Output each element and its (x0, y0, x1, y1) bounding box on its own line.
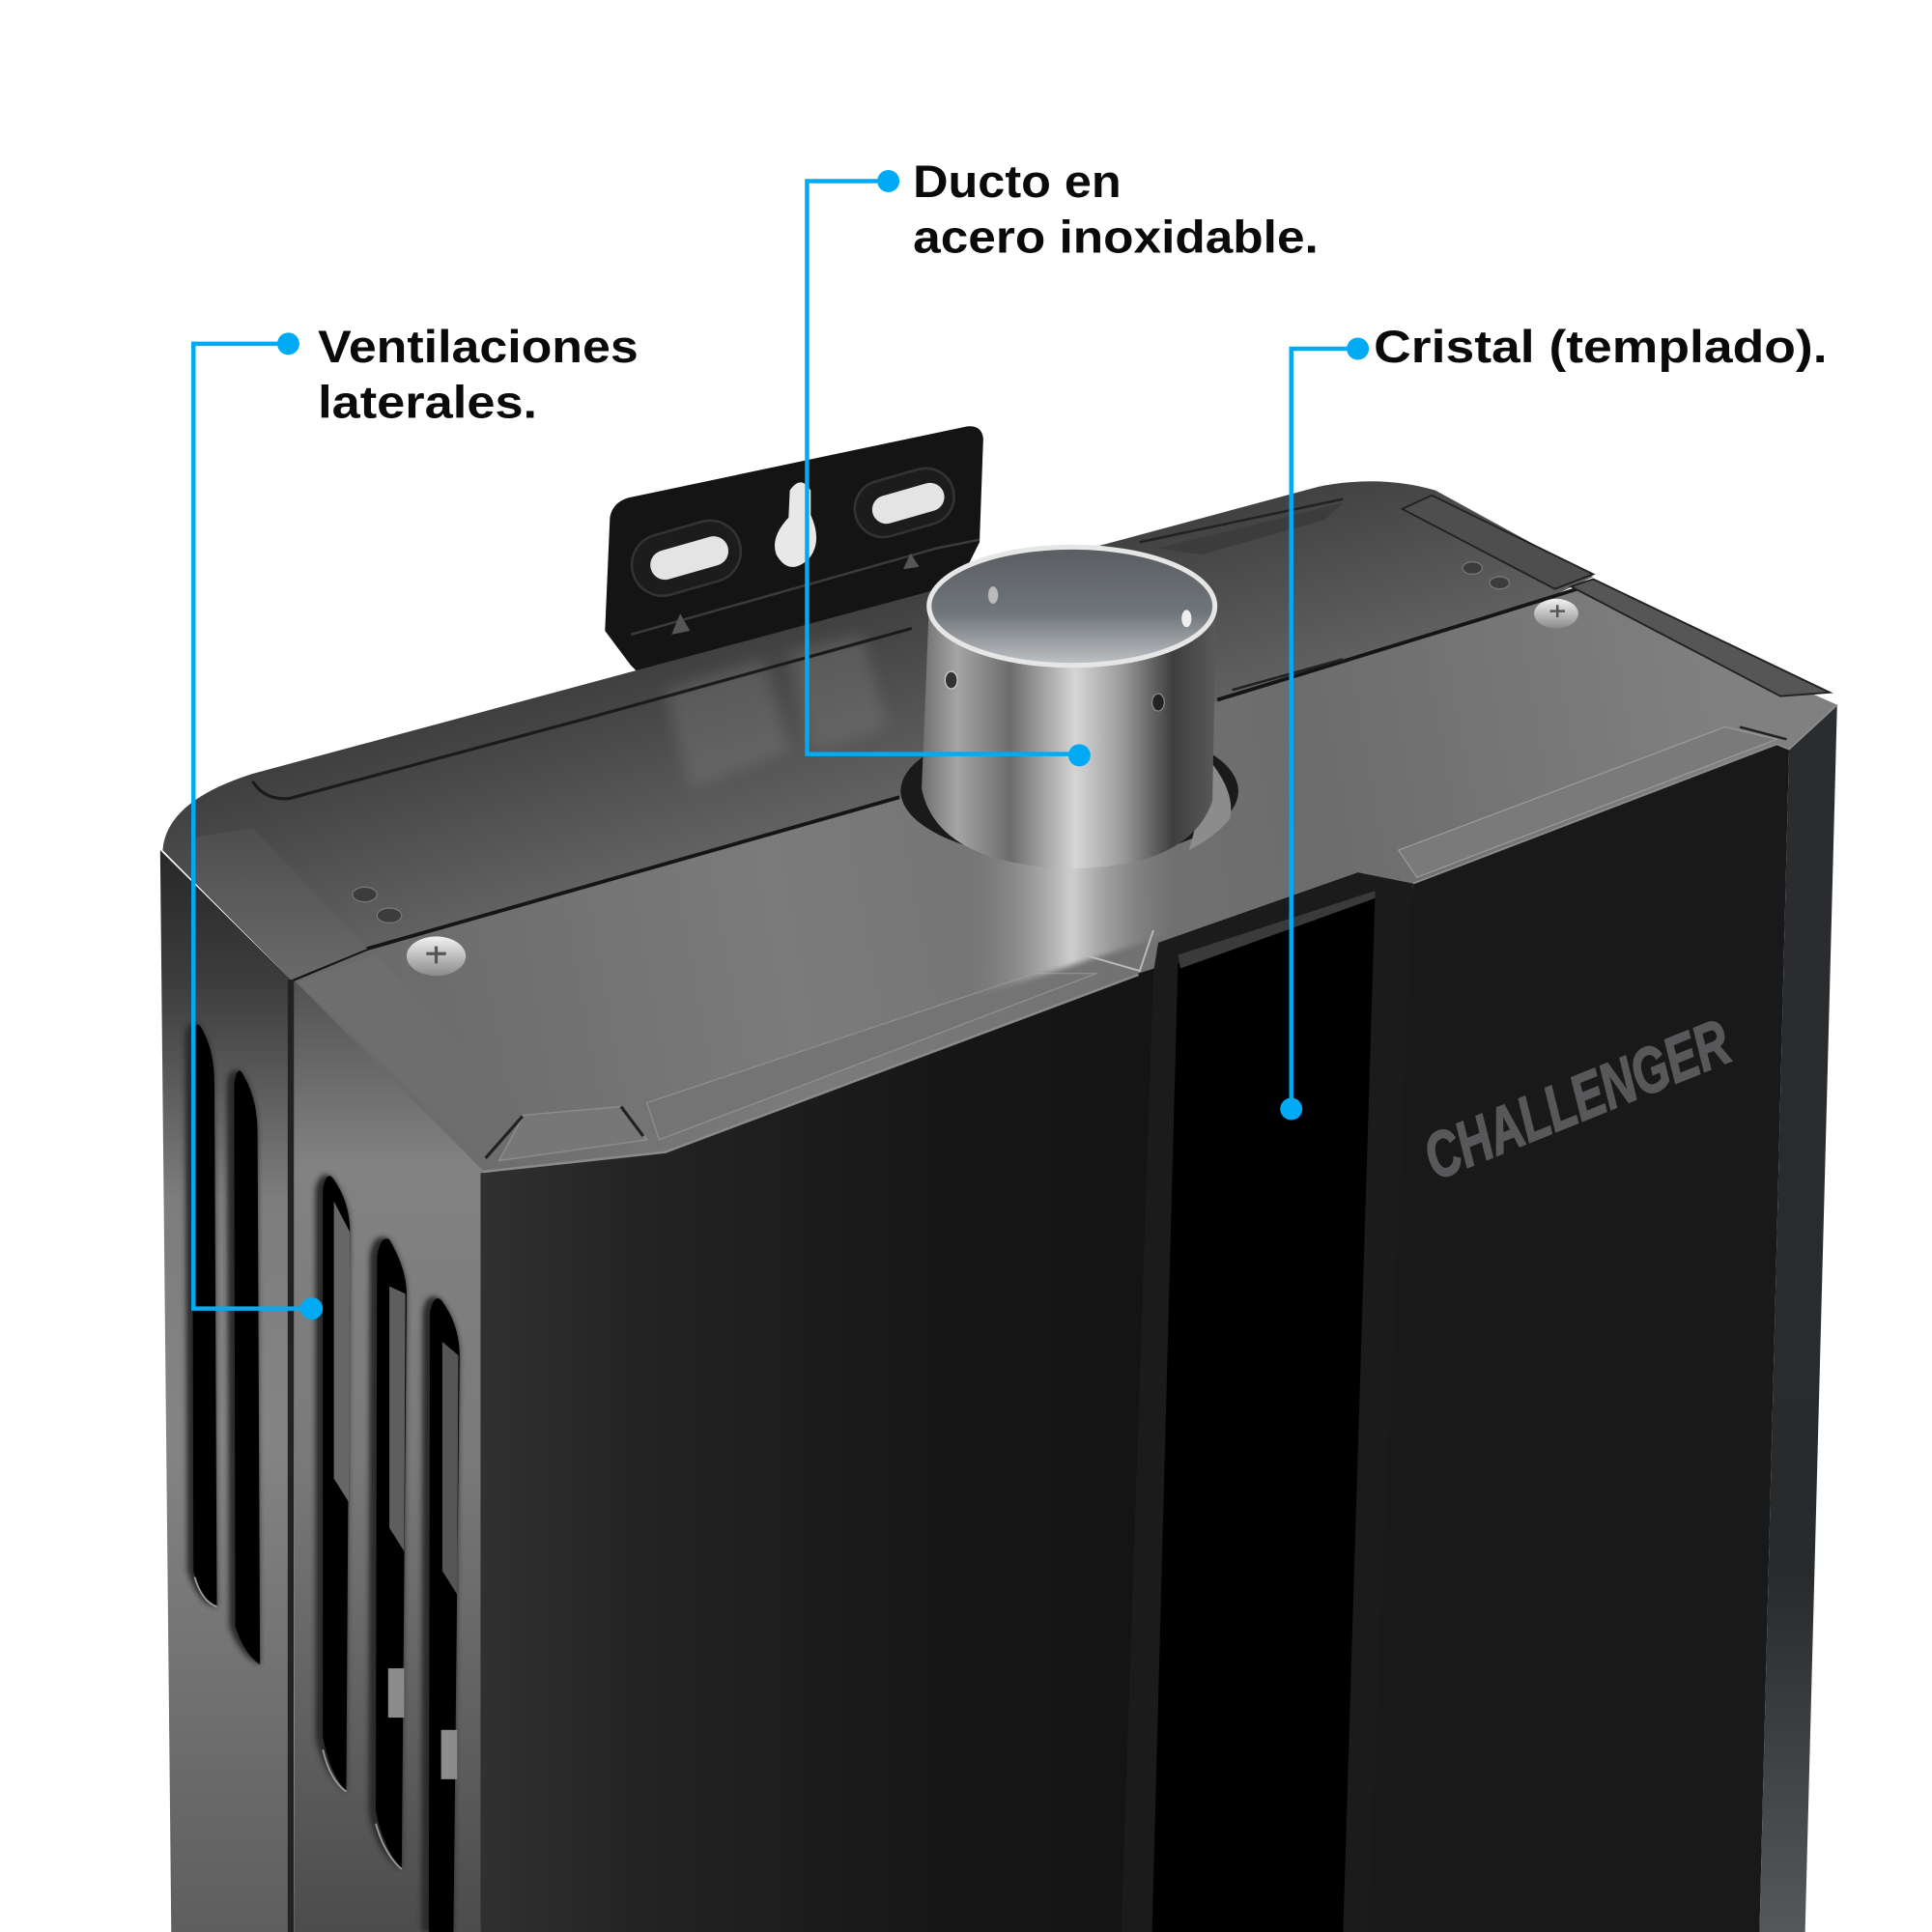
top front panel (291, 589, 1837, 1173)
reflection strips on back panel (666, 635, 887, 788)
callout: Ventilaciones laterales: laterales. (318, 377, 537, 428)
main front face (480, 967, 1158, 1932)
callout: Ducto en acero inoxidable: Ducto en (913, 156, 1122, 208)
callout: Cristal templado: Cristal (templado). (1374, 322, 1828, 373)
duct collar hole (900, 722, 1238, 860)
glass trim (1122, 872, 1413, 1932)
logo: CHALLENGER: CHALLENGER (1414, 1007, 1741, 1194)
right front face (1343, 744, 1789, 1932)
edge highlights (483, 975, 1139, 1172)
icon: left screw (407, 936, 466, 976)
left front-side panel (294, 980, 483, 1932)
callout: Ventilaciones laterales (193, 322, 639, 1320)
small rivets (353, 562, 1510, 923)
side ventilation slots (185, 1023, 460, 1932)
callout: Ventilaciones laterales: Ventilaciones (318, 322, 639, 373)
seams (294, 797, 899, 980)
callout: Ducto en acero inoxidable (807, 156, 1319, 766)
icon: wall mounting bracket (605, 426, 983, 675)
top back panel (162, 481, 1593, 980)
stainless steel duct (922, 547, 1216, 868)
left side panel (160, 850, 295, 1932)
panel: water heater body (160, 481, 1837, 1932)
callout: Cristal templado (1280, 322, 1828, 1120)
tempered glass (1152, 895, 1375, 1932)
reflection below duct (961, 850, 1182, 998)
heater internals seen through slots (334, 1202, 350, 1502)
corner flanges (191, 828, 367, 980)
icon: right screw (1534, 599, 1578, 629)
right chamfer (1759, 705, 1837, 1932)
callout: Ducto en acero inoxidable: acero inoxidable. (913, 212, 1319, 263)
